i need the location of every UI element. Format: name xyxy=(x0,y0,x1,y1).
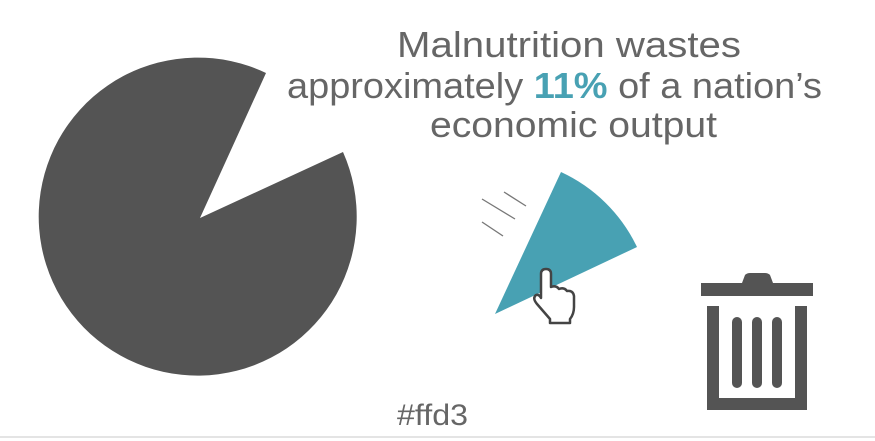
title xyxy=(287,24,822,145)
teal slice (11%) xyxy=(495,172,637,314)
title: economic output xyxy=(430,104,717,145)
motion lines xyxy=(482,192,526,236)
icon: trash can xyxy=(701,273,813,410)
title: approximately 11% of a nation’s xyxy=(287,65,822,106)
pie chart with missing slice xyxy=(39,58,357,376)
icon: pointing hand xyxy=(534,269,574,323)
title: Malnutrition wastes xyxy=(397,24,741,65)
hashtag label: #ffd3 xyxy=(397,399,468,432)
